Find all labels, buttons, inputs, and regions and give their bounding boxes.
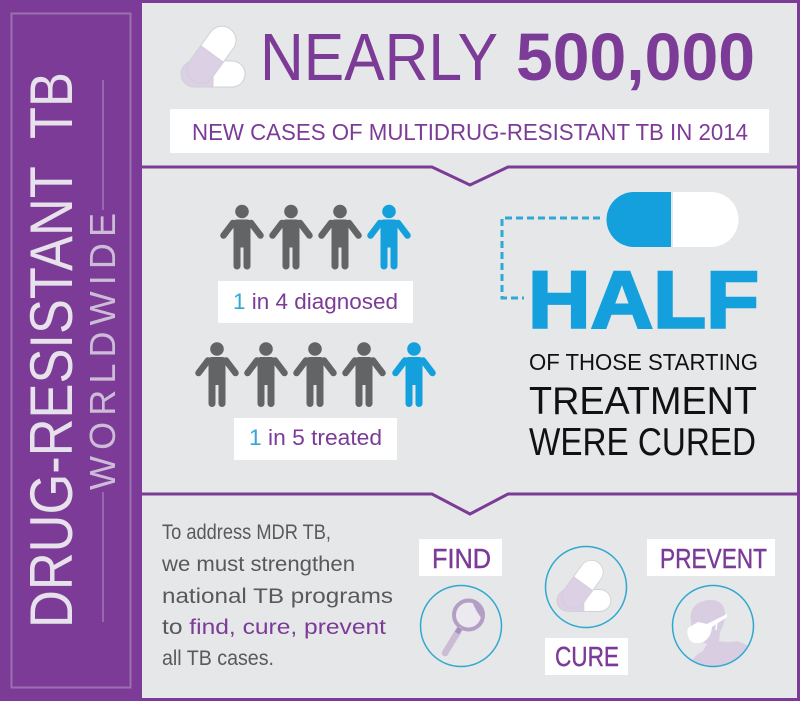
label: cure: CURE [555, 641, 619, 672]
headline: half: HALF [528, 256, 759, 346]
subheading banner [170, 109, 769, 153]
text: call to action: we must strengthen [161, 552, 355, 576]
heading: nearly 500,000: 500,000 [516, 20, 755, 95]
text: of those starting treatment were cured: WERE CURED [529, 421, 756, 464]
pictogram: 1 in 5 people [198, 342, 432, 404]
icon: person with mask [672, 586, 754, 670]
subheading banner: NEW CASES OF MULTIDRUG-RESISTANT TB IN 2014 [192, 119, 748, 145]
text: call to action: all TB cases. [162, 646, 274, 670]
label: 1 in 5 treated: 1 in 5 treated [249, 425, 382, 450]
icon: cure pill [546, 546, 626, 628]
panel: left sidebar [0, 0, 142, 701]
heading: nearly 500,000 [260, 20, 755, 95]
sidebar title: DRUG-RESISTANT TB [18, 72, 85, 628]
text: call to action: national TB programs [162, 584, 393, 608]
label: 1 in 4 diagnosed [218, 281, 413, 323]
icon: header pill [181, 21, 245, 89]
text: of those starting treatment were cured: TREATMENT [529, 380, 757, 423]
label: find [419, 539, 502, 576]
text: of those starting treatment were cured [529, 349, 758, 464]
text: call to action: To address MDR TB, [162, 520, 331, 544]
text: call to action: to find, cure, prevent [162, 615, 386, 639]
label: find: FIND [432, 543, 491, 574]
label: prevent [647, 539, 775, 576]
label: 1 in 4 diagnosed: 1 in 4 diagnosed [233, 289, 398, 314]
pictogram: 1 in 4 people [224, 205, 408, 266]
icon: half blue half white capsule with dashed connector [502, 192, 738, 298]
text: call to action [161, 520, 393, 670]
icon: magnifying glass [420, 586, 502, 666]
sidebar subtitle: WORLDWIDE [82, 213, 123, 490]
label: 1 in 5 treated [234, 418, 397, 460]
text: of those starting treatment were cured: OF THOSE STARTING [529, 349, 758, 375]
label: prevent: PREVENT [660, 543, 767, 574]
heading: nearly 500,000: NEARLY [260, 20, 498, 95]
